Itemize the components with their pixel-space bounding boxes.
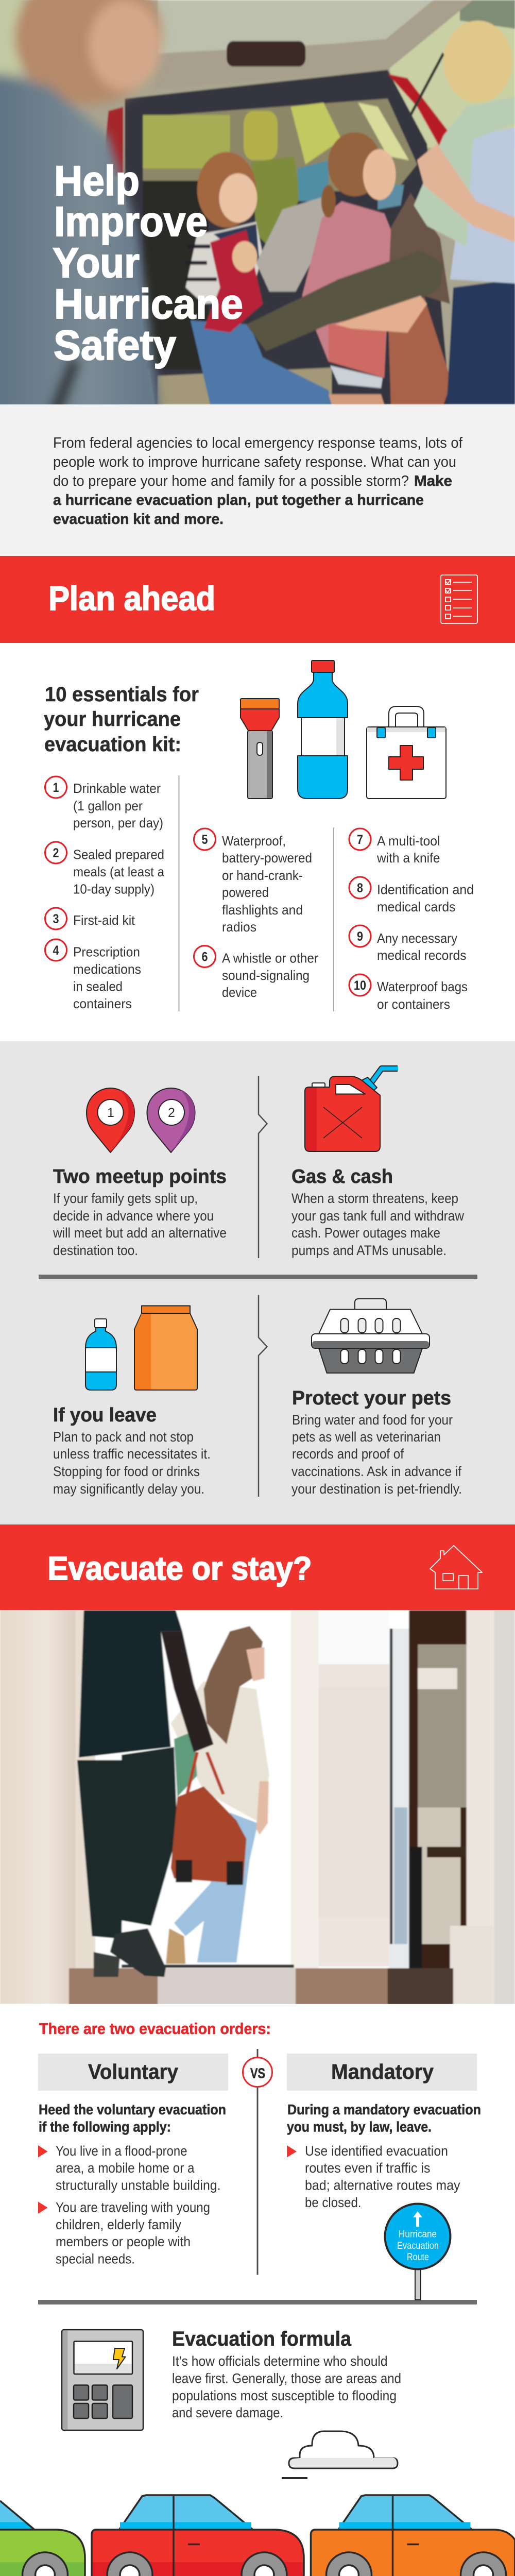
item 5: radios: [222, 919, 256, 935]
heading: kit: your hurricane: [44, 708, 181, 731]
item 3: First-aid kit: [73, 912, 135, 928]
panel: intro: people work to improve hurricane safety response. What can you: [53, 454, 456, 470]
text block: if you leave: unless traffic necessitates it.: [53, 1446, 211, 1462]
photo: couple leaving home with a bag: [0, 1611, 515, 2005]
item 9: Any necessary: [377, 930, 457, 946]
title: [53, 158, 243, 369]
text block: two meetup points: will meet but add an alternative: [53, 1225, 227, 1241]
item 1: (1 gallon per: [73, 798, 143, 814]
icon: meetup pins: [87, 1088, 195, 1153]
comparison: mandatory column: Use identified evacuation: [305, 2143, 448, 2159]
icon: gas can: [305, 1069, 398, 1151]
comparison: voluntary column: members or people with: [56, 2234, 191, 2249]
panel: intro: a hurricane evacuation plan, put together a hurricane: [53, 492, 424, 509]
text block: protect your pets: vaccinations. Ask in advance if: [291, 1464, 462, 1479]
text block: if you leave: Plan to pack and not stop: [53, 1429, 194, 1445]
icon: calculator: [62, 2330, 143, 2430]
item 2: meals (at least a: [73, 864, 164, 879]
text block: protect your pets: Protect your pets: [292, 1387, 451, 1409]
panel: intro: do to prepare your home and family for a possible storm?: [53, 473, 409, 489]
item 8: 8: [357, 881, 363, 895]
icon: checklist: [441, 575, 477, 623]
item 8: medical cards: [377, 899, 455, 914]
item 5: battery-powered: [222, 850, 312, 866]
item 1: Drinkable water: [73, 781, 161, 796]
item 1: 1: [53, 781, 59, 795]
text block: gas and cash: pumps and ATMs unusable.: [291, 1243, 447, 1258]
item 6: sound-signaling: [222, 968, 310, 983]
text block: evacuation formula: It’s how officials determine who should: [172, 2353, 387, 2369]
item 6: 6: [202, 950, 208, 964]
car: orange: [311, 2495, 515, 2576]
car: red: [92, 2495, 304, 2576]
list column 1: [45, 775, 179, 1011]
item 5: flashlights and: [222, 902, 303, 918]
comparison: voluntary column: [38, 2054, 228, 2267]
item 4: Prescription: [73, 944, 140, 959]
item 7: [349, 828, 440, 866]
icon: evacuation route sign: Hurricane: [399, 2229, 437, 2240]
title: Help: [54, 158, 140, 205]
item 1: [45, 776, 163, 831]
icon: evacuation route sign: Route: [407, 2252, 429, 2263]
comparison: mandatory column: Mandatory: [331, 2060, 434, 2083]
item 5: 5: [202, 833, 208, 847]
comparison: voluntary column: Voluntary: [88, 2060, 178, 2083]
item 6: device: [222, 985, 257, 1000]
text block: if you leave: may significantly delay you.: [53, 1481, 204, 1497]
item 10: Waterproof bags: [377, 979, 468, 994]
icon: evacuation route sign: [38, 2204, 477, 2304]
item 7: A multi-tool: [377, 833, 440, 849]
comparison: mandatory column: be closed.: [305, 2195, 362, 2210]
text block: two meetup points: destination too.: [53, 1243, 138, 1258]
text block: gas and cash: When a storm threatens, keep: [291, 1191, 458, 1206]
item 7: with a knife: [376, 850, 440, 866]
item 1: person, per day): [73, 815, 163, 831]
text block: evacuation formula: leave first. Generally, those are areas and: [172, 2371, 401, 2386]
heading: kit: 10 essentials for: [45, 683, 199, 706]
text block: if you leave: Stopping for food or drinks: [53, 1464, 200, 1479]
item 4: 4: [53, 943, 59, 958]
text block: gas and cash: [291, 1166, 465, 1258]
comparison: mandatory column: routes even if traffic is: [305, 2160, 431, 2176]
icon: pet carrier: [312, 1299, 430, 1373]
item 4: in sealed: [73, 979, 123, 994]
text block: gas and cash: Gas & cash: [291, 1166, 393, 1188]
comparison: voluntary column: Heed the voluntary evacuation: [39, 2102, 226, 2117]
item 4: medications: [73, 961, 141, 977]
text block: gas and cash: your gas tank full and withdraw: [291, 1208, 465, 1224]
panel: intro: Make: [414, 473, 452, 489]
vs divider: [243, 2049, 272, 2275]
item 2: [45, 842, 164, 896]
title: Hurricane: [54, 281, 243, 328]
icon: meetup pins: 1: [107, 1106, 114, 1120]
comparison: mandatory column: During a mandatory evacuation: [287, 2102, 481, 2117]
panel: intro: evacuation kit and more.: [53, 511, 224, 528]
text block: evacuation formula: Evacuation formula: [172, 2328, 352, 2350]
hero photo: family packing the car: [0, 0, 515, 415]
subheading: two evacuation orders: There are two evacuation orders:: [39, 2020, 271, 2038]
section banner: evacuate or stay: [0, 1524, 515, 1610]
text block: evacuation formula: and severe damage.: [172, 2405, 283, 2420]
icon: cloud: [282, 2431, 398, 2478]
icon: water and food: [85, 1306, 197, 1390]
comparison: mandatory column: [287, 2054, 481, 2210]
text block: gas and cash: cash. Power outages make: [291, 1225, 440, 1241]
item 3: [45, 908, 135, 929]
comparison: voluntary column: if the following apply:: [39, 2119, 171, 2135]
text block: two meetup points: [53, 1166, 227, 1258]
text block: protect your pets: pets as well as veterinarian: [292, 1429, 441, 1445]
text block: two meetup points: If your family gets split up,: [53, 1191, 198, 1206]
text block: protect your pets: [291, 1387, 462, 1497]
text block: if you leave: [53, 1404, 211, 1497]
icon: meetup pins: 2: [168, 1106, 175, 1120]
item 6: A whistle or other: [222, 950, 318, 965]
item 10: or containers: [377, 996, 450, 1012]
text block: protect your pets: records and proof of: [292, 1446, 404, 1462]
comparison: voluntary column: structurally unstable building.: [56, 2177, 220, 2193]
item 4: containers: [73, 996, 132, 1011]
vs divider: VS: [250, 2065, 265, 2081]
text block: protect your pets: Bring water and food for your: [292, 1412, 453, 1428]
icon: house: [430, 1546, 482, 1589]
illustration: traffic of cars: [0, 2495, 515, 2576]
item 8: Identification and: [377, 882, 474, 897]
title: Improve: [54, 198, 208, 245]
text block: two meetup points: Two meetup points: [53, 1166, 227, 1188]
item 5: Waterproof,: [222, 833, 286, 849]
comparison: voluntary column: You live in a flood-prone: [56, 2143, 187, 2159]
item 10: [349, 974, 468, 1012]
comparison: voluntary column: You are traveling with young: [56, 2200, 210, 2215]
comparison: mandatory column: you must, by law, leave.: [287, 2119, 432, 2135]
panel: intro: From federal agencies to local emergency response teams, lots of: [53, 435, 463, 451]
icon: water bottle: [298, 660, 348, 799]
comparison: voluntary column: children, elderly family: [56, 2217, 182, 2232]
text block: evacuation formula: [172, 2328, 401, 2420]
icon: flashlight: [241, 699, 279, 799]
item 8: [349, 877, 474, 914]
heading: kit: [44, 683, 199, 756]
car: green: [0, 2501, 85, 2576]
comparison: voluntary column: special needs.: [56, 2251, 135, 2267]
panel: preparation tips: [0, 1041, 515, 1524]
panel: intro: [0, 404, 515, 556]
item 5: or hand-crank-: [222, 868, 303, 883]
item 2: Sealed prepared: [73, 847, 164, 862]
icon: first-aid kit: [367, 706, 446, 799]
title: Your: [53, 240, 140, 286]
section banner: plan ahead: Plan ahead: [48, 579, 215, 617]
text block: two meetup points: decide in advance where you: [53, 1208, 214, 1224]
item 10: 10: [354, 978, 366, 993]
section banner: plan ahead: [0, 556, 515, 643]
comparison: voluntary column: area, a mobile home or a: [56, 2160, 195, 2176]
title: Safety: [54, 322, 176, 369]
list column 3: [349, 828, 474, 1012]
comparison: mandatory column: bad; alternative routes may: [305, 2177, 460, 2193]
icon: evacuation route sign: Evacuation: [397, 2241, 439, 2251]
heading: kit: evacuation kit:: [44, 733, 181, 756]
text block: protect your pets: your destination is pet-friendly.: [291, 1481, 462, 1497]
item 9: medical records: [377, 947, 467, 963]
item 2: 10-day supply): [73, 881, 154, 896]
item 9: 9: [357, 929, 363, 944]
text block: evacuation formula: populations most susceptible to flooding: [172, 2388, 397, 2403]
item 5: powered: [222, 885, 269, 900]
section banner: evacuate or stay: Evacuate or stay?: [47, 1550, 312, 1587]
item 6: [194, 946, 318, 1000]
item 3: 3: [53, 912, 59, 926]
item 4: [45, 939, 141, 1011]
text block: if you leave: If you leave: [53, 1404, 157, 1426]
item 5: [194, 828, 312, 935]
item 2: 2: [53, 846, 59, 860]
item 7: 7: [357, 833, 363, 847]
item 9: [349, 925, 467, 963]
list column 2: [194, 827, 334, 1011]
